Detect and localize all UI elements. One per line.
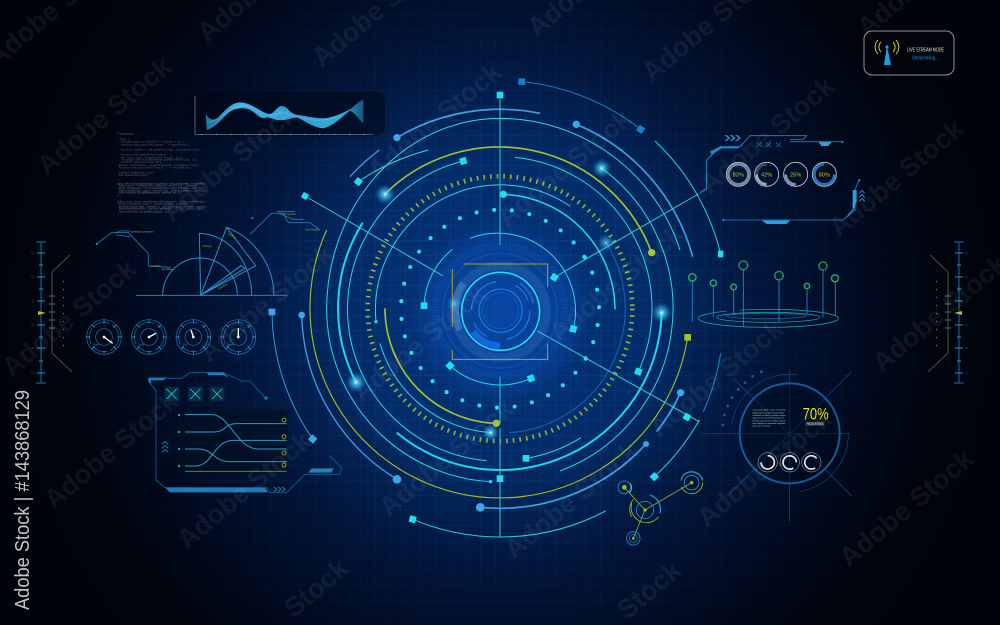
radar labels: Training <box>202 244 212 248</box>
watermarks: Adobe Stock <box>543 218 690 348</box>
cyan thin rings <box>327 118 680 482</box>
dot column <box>62 281 64 346</box>
watermarks: Adobe Stock <box>694 70 841 200</box>
core glow <box>410 222 590 402</box>
hatch bar <box>308 468 334 473</box>
marker <box>38 311 46 315</box>
bright ring <box>462 272 540 350</box>
description text: adipiscing elit sed do eiusmod tempor <box>752 411 785 414</box>
large node <box>630 495 660 523</box>
wave ribbon <box>206 99 363 130</box>
watermarks: Adobe Stock <box>491 103 638 233</box>
code text block: Programming .... <box>117 133 141 136</box>
left scale labels: 20 <box>31 346 35 350</box>
code text block: } <box>117 179 119 182</box>
main circle <box>740 383 840 483</box>
percent gauge 25: 25% <box>790 172 801 178</box>
scale axis <box>36 242 46 383</box>
code text block: System.printValue(number, getNumber(i), list, parse, yourValues.length, position); <box>119 205 207 208</box>
pin heads <box>689 261 838 290</box>
ribbon mesh strands <box>207 105 351 122</box>
percent gauge 42 <box>755 162 779 186</box>
bottom node <box>627 532 640 545</box>
description text: nisi ut aliquip ex ea commodo consequat <box>752 422 785 425</box>
crossing lines <box>185 415 287 466</box>
code text block: function sum.printInfo("result: " + returnValue); <box>119 166 192 169</box>
code text block: sum.showValues(list); <box>119 174 150 177</box>
code text block: String returnValue.number = new String(list + position); <box>119 203 189 206</box>
left scale labels: 10 <box>31 371 35 375</box>
bracket ticks <box>945 296 951 328</box>
up chevrons <box>162 442 168 452</box>
watermarks: Adobe Stock <box>691 403 838 533</box>
antenna icon <box>875 40 899 65</box>
percent gauge 42: 42% <box>761 172 772 178</box>
percent gauge 83 <box>726 162 750 186</box>
inner blue rings <box>479 289 522 332</box>
scale ticks <box>37 253 45 373</box>
gauge 1 <box>87 320 121 354</box>
icon tiles <box>164 387 224 401</box>
radar sectors <box>163 227 274 295</box>
radar labels: purchase <box>162 267 173 271</box>
top right percent panel <box>700 135 865 224</box>
right chevrons <box>724 135 741 141</box>
right chevrons <box>274 487 285 492</box>
badge status: Streamming.... <box>912 56 940 62</box>
right scale labels: 30 <box>965 323 969 327</box>
percent gauge 25 <box>784 162 808 186</box>
code text block: System.printValue(list, position, returnValue.list, yourValues.getNumber(i), yourValues); <box>119 189 207 192</box>
description text: duis aute irure dolor <box>752 425 771 428</box>
node links <box>624 483 692 538</box>
blue dots <box>721 370 763 426</box>
radar chart panel <box>96 212 320 295</box>
description text: Lorem ipsum dolor sit amet consectetur <box>752 409 786 412</box>
yellow-green nodes <box>493 249 691 427</box>
central target <box>435 246 565 376</box>
value: 70% <box>803 405 829 424</box>
thick cyan arcs <box>338 194 662 470</box>
up chevrons <box>859 190 865 201</box>
right scale labels: 60 <box>965 251 969 255</box>
code text block: public static String processOperation(int operation, String yourValuesMap, String numMap) { <box>117 182 207 185</box>
right scale labels <box>965 251 969 375</box>
yellow-green inner arcs <box>385 147 652 423</box>
dark blue arc <box>509 243 625 433</box>
gauge row <box>87 320 256 354</box>
right scale labels: 10 <box>965 371 969 375</box>
right scale labels: 50 <box>965 275 969 279</box>
description text: incididunt ut labore et dolore magna <box>752 414 787 417</box>
left scale <box>36 242 72 383</box>
tick ring <box>368 176 632 441</box>
percent gauge 80 <box>812 162 836 186</box>
progress panel <box>702 370 852 522</box>
outer arcs <box>272 82 721 537</box>
description text: nostrud exercitation ullamco laboris <box>752 419 786 422</box>
blue arcs <box>302 109 693 508</box>
left scale labels: 40 <box>31 299 35 303</box>
dim gear ring <box>435 246 565 376</box>
frame accents <box>762 142 857 224</box>
description text <box>752 409 787 428</box>
watermarks: Adobe Stock <box>643 313 790 443</box>
hologram pin chart <box>689 261 838 327</box>
dot column <box>936 281 938 346</box>
axes and spokes <box>305 95 699 537</box>
yellow-green outer arc <box>310 230 688 498</box>
small crosses <box>756 142 781 147</box>
scale ticks <box>955 253 963 373</box>
chart backdrop <box>183 410 287 473</box>
watermarks: Adobe Stock <box>31 51 178 181</box>
badge frame <box>864 31 954 75</box>
watermarks: Adobe Stock <box>373 393 520 523</box>
mini gauges <box>758 453 821 472</box>
code text block: Loadnet.showValues.list ; <box>119 172 156 175</box>
radar baseline <box>136 294 287 297</box>
cross lines <box>702 370 852 522</box>
chart axes <box>195 96 373 134</box>
code text block: String returnValue = checkValue(num, yourValues.list); <box>119 164 199 167</box>
gauge 4: Status <box>227 342 235 346</box>
percent gauge 80: 80% <box>819 172 830 178</box>
watermarks: Adobe Stock <box>361 56 508 186</box>
live stream badge <box>864 31 954 75</box>
right scale labels: 20 <box>965 346 969 350</box>
code text block: return returnValue.list.getNumber(position, list + 1); <box>119 211 175 214</box>
bottom left flow panel <box>148 372 342 493</box>
value label: PROGRESSING <box>806 422 824 426</box>
watermarks: Stock <box>611 554 688 625</box>
watermarks: Adobe Stock <box>346 278 493 408</box>
left callout line <box>97 231 171 267</box>
platform ellipses <box>698 309 838 327</box>
gauge 1: Wind <box>93 342 100 346</box>
gauge 2: Tools <box>138 342 145 346</box>
watermarks: Adobe Stock <box>833 443 980 573</box>
outer arcs <box>732 374 848 492</box>
code text block: function main.printInfo("n = values = %i"); <box>121 141 185 144</box>
halo flare <box>446 296 462 312</box>
watermarks: Adobe Stock <box>193 238 340 368</box>
watermarks: Adobe Stock <box>171 425 318 555</box>
pin stems <box>692 270 835 327</box>
top left node <box>618 481 632 494</box>
watermarks: Adobe Stock <box>823 113 970 243</box>
code text block: function update = sum.parseInt(node, yourValues.list); <box>121 149 201 152</box>
code text block: for (size node; i<yourValues.length; i++) <box>121 156 182 159</box>
watermarks: Adobe Stock <box>498 435 645 565</box>
right callout line <box>250 212 320 234</box>
gauge 2 <box>132 320 166 354</box>
watermarks: Stock <box>278 552 355 623</box>
watermarks: Adobe Stock <box>38 385 185 515</box>
scale axis <box>954 242 964 383</box>
code text block: function sum.printInfo("N"); <box>121 161 162 164</box>
code text block: class { <box>119 138 130 141</box>
bracket ticks <box>49 296 55 328</box>
bracket <box>52 255 72 372</box>
code text block: System.output(returnValue, yourValues.getNumber(i + 1), list, position, number); <box>119 208 205 211</box>
code text block <box>117 133 208 216</box>
glow points <box>346 159 672 441</box>
radar labels: Trading <box>227 231 237 240</box>
central hud dial <box>269 78 723 537</box>
radar labels: User Health <box>305 227 320 231</box>
halo <box>455 266 547 358</box>
end markers <box>282 418 286 467</box>
left scale labels: 60 <box>31 251 35 255</box>
badge title: LIVE STREAM MODE <box>907 48 944 54</box>
node network <box>618 472 703 545</box>
marker <box>954 311 962 315</box>
left scale labels: 50 <box>31 275 35 279</box>
chart backdrop <box>187 91 385 136</box>
radar labels: Integration <box>283 212 296 216</box>
radar labels: Location <box>150 263 161 267</box>
watermarks: Adobe Stock <box>156 98 303 228</box>
gold brackets <box>452 264 548 359</box>
baseline <box>185 470 287 473</box>
blue nodes <box>269 78 684 512</box>
frame accents <box>148 372 268 492</box>
right scale <box>928 242 964 383</box>
gauge 3 <box>176 320 211 354</box>
code text block: function sum.printValue(sum.integerValue(list, i)); <box>122 159 198 162</box>
code text block: return returnValue.list.getNumber(position, yourValues.list + 1); <box>119 192 182 195</box>
code text block: System.output = getObjectValue.byName(int.valueOf(list , location)); <box>119 185 199 188</box>
code text block: } <box>117 213 119 216</box>
description text: aliqua ut enim ad minim veniam quis <box>752 417 784 420</box>
watermarks: Adobe Stock <box>0 253 143 383</box>
radar labels: Cashflow <box>217 282 228 291</box>
arc end nodes <box>301 92 723 523</box>
percent gauge 83: 83% <box>733 172 744 178</box>
gauge 4 <box>221 320 256 354</box>
dot ring <box>400 208 600 409</box>
top right node <box>681 472 703 494</box>
code text block: String returnValue.key = int.processValue(position-number.getInstance + list, parse); <box>119 187 205 190</box>
right scale labels: 40 <box>965 299 969 303</box>
wave chart <box>187 91 385 136</box>
panel frame <box>148 373 342 493</box>
panel frame <box>700 136 807 192</box>
row dots <box>178 414 180 467</box>
code text block: function sum.printInfo(param: " = yourValues"); <box>121 143 191 146</box>
radar labels <box>131 212 320 291</box>
code text block: } <box>117 195 119 198</box>
code text block: public static String checkOperation(String number, String yourValuesMap) { <box>117 201 208 204</box>
bracket <box>928 255 948 372</box>
code text block: function sum.printInfo("number: "); <box>121 154 173 157</box>
left scale labels <box>31 251 35 375</box>
connector into top right panel <box>698 147 720 194</box>
gauge 3: Pro <box>183 342 188 346</box>
left scale labels: 30 <box>31 323 35 327</box>
side credit text: Adobe Stock | #143868129 <box>12 390 34 610</box>
radar labels: working & progress <box>131 229 154 233</box>
